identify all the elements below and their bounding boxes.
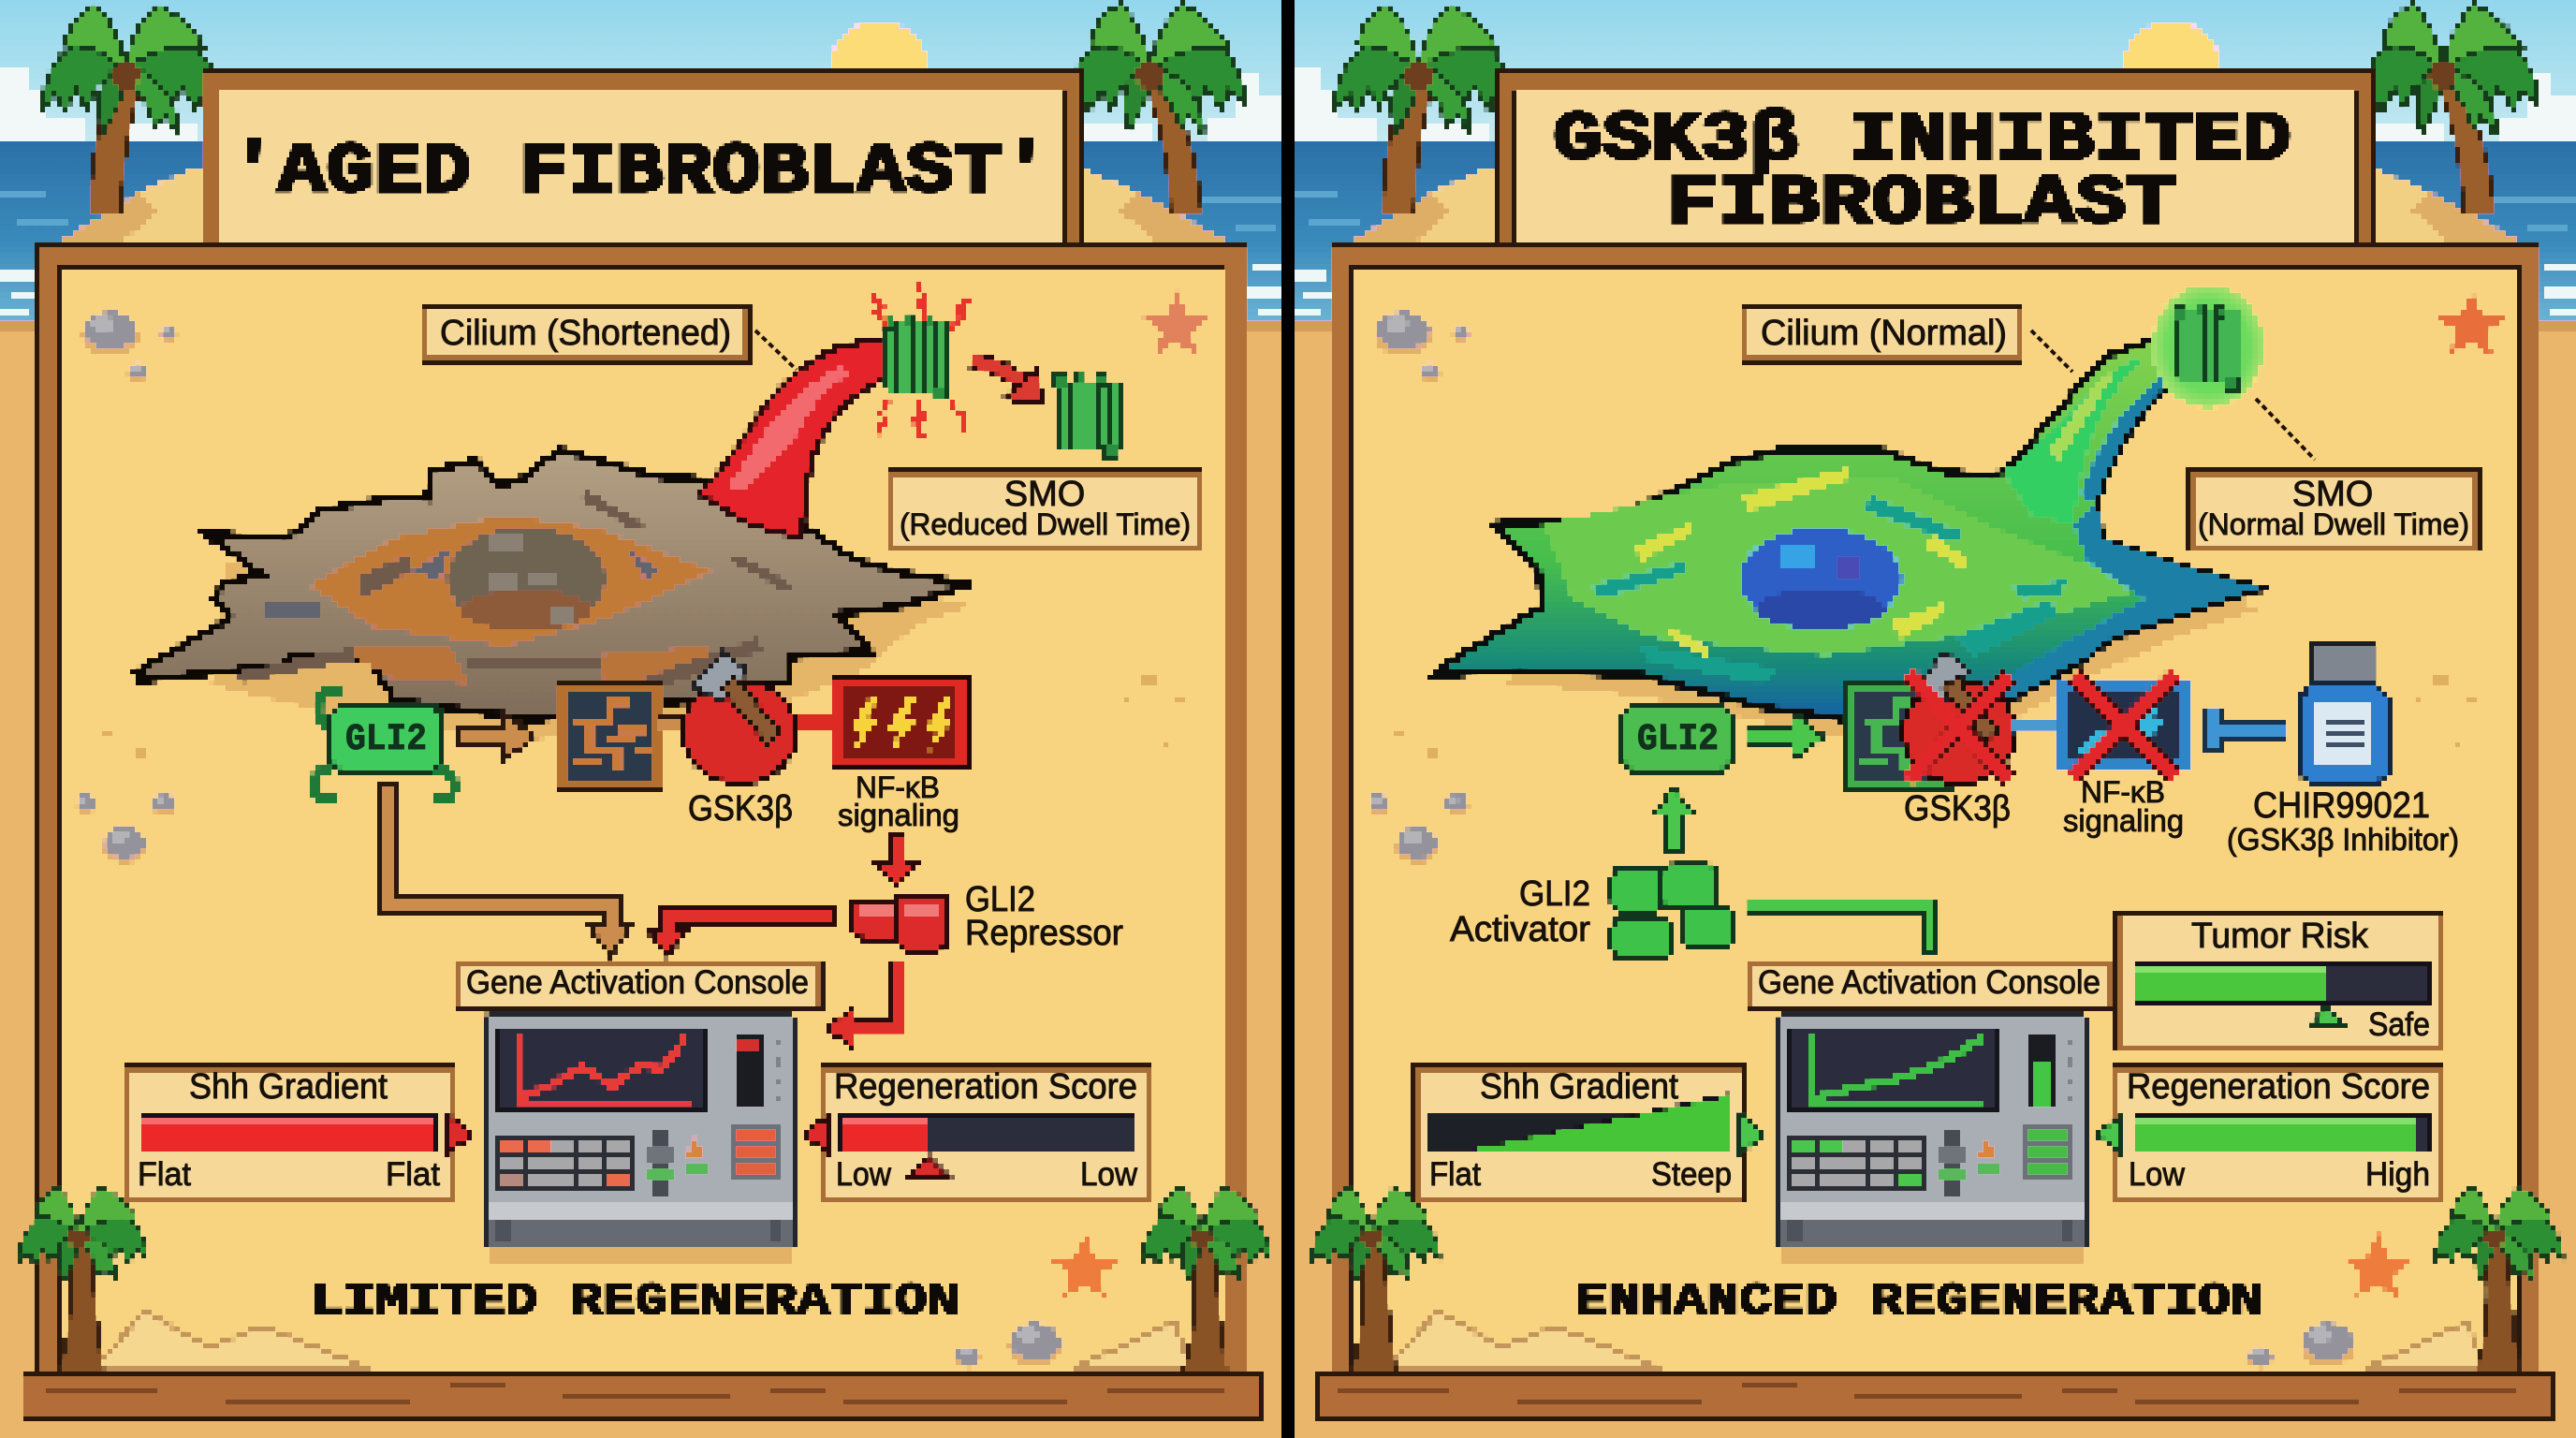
label: GLI2: GLI2 <box>345 719 427 761</box>
tumor risk card <box>2114 910 2446 1052</box>
arrow: GLI2 to console top <box>378 785 631 956</box>
icon: GLI2 hooks <box>314 692 454 800</box>
icon: palm tree top left (aged) <box>41 5 221 213</box>
label: regeneration score inhibited <box>2127 1067 2430 1193</box>
outcome text: enhanced regeneration: ENHANCED REGENERATION <box>1575 1277 2263 1328</box>
icon: SMO on shortened cilium <box>881 314 950 400</box>
icon: circuit box <box>554 681 666 793</box>
label: GLI2 activator: Activator <box>1450 910 1590 949</box>
arrow: GLI2 to circuit (green) <box>1747 713 1824 760</box>
label: NF-κB signaling inactive <box>2063 775 2184 838</box>
Shh gradient card (aged) <box>122 1063 456 1205</box>
label: tumor risk <box>2191 917 2430 1043</box>
label: regeneration score inhibited: Regeneration Score <box>2127 1067 2430 1107</box>
regeneration score card (inhibited) <box>2112 1063 2446 1205</box>
label: tumor risk: Safe <box>2368 1006 2430 1043</box>
label: NF-κB signaling inactive: NF-κB <box>2081 775 2165 809</box>
arrow: console to regeneration score <box>803 1114 829 1154</box>
label: Shh gradient inhibited <box>1429 1067 1732 1193</box>
label board: SMO normal <box>2186 466 2481 552</box>
text labels: aged panel <box>138 314 1191 1193</box>
label: gene activation console inhibited: Gene Activation Console <box>1758 964 2100 1001</box>
red X over NF-κB <box>2072 675 2175 778</box>
inhibition bar: CHIR99021 to NF-κB <box>2206 708 2286 750</box>
title text (inhibited) <box>1553 101 2291 242</box>
icon: inactive GSK3β with hammer <box>1903 652 2015 784</box>
label: Shh gradient: Flat <box>386 1156 440 1193</box>
label: NF-κB signaling inactive: signaling <box>2063 803 2184 838</box>
cilium (shortened, red) <box>698 339 891 538</box>
label: regeneration score inhibited: Low <box>2129 1156 2186 1193</box>
label board: gene activation console (aged) <box>453 959 824 1011</box>
aged fibroblast cell <box>136 449 973 741</box>
panel background: beach, sky, sea and sun (aged) <box>0 0 1283 1438</box>
label: GLI2 repressor: GLI2 <box>965 880 1035 919</box>
icon: GLI2 repressor blob <box>852 899 947 955</box>
label: SMO reduced: SMO <box>1004 475 1085 514</box>
label: GSK3β: GSK3β <box>688 789 793 829</box>
icon: NF-κB box (inhibited) <box>2054 678 2193 772</box>
bottom wooden beam (aged) <box>21 1369 1265 1421</box>
main panel frame (inhibited) <box>1329 242 2541 1374</box>
arrow: Shh to console (green) <box>1740 1114 1764 1154</box>
arrow: repressor to console side <box>826 961 904 1049</box>
label: Shh gradient inhibited: Flat <box>1429 1156 1481 1193</box>
label: SMO normal: SMO <box>2292 475 2373 514</box>
panel background: beach, sky, sea and sun (inhibited) <box>1293 0 2576 1438</box>
leader line: cilium normal label <box>2031 330 2072 372</box>
label: GLI2 block: GLI2 <box>1637 719 1719 761</box>
icon: detached SMO <box>1054 373 1123 459</box>
arrow: GLI2 to circuit <box>459 713 535 760</box>
gene activation console (inhibited) <box>1775 1014 2089 1249</box>
label: regeneration score: Low <box>1080 1156 1138 1193</box>
leader line: SMO normal label <box>2256 399 2315 460</box>
title text (inhibited): FIBROBLAST <box>1667 165 2177 242</box>
gene activation console (aged) <box>482 1014 797 1249</box>
text labels: inhibited panel <box>1429 314 2469 1193</box>
title board (inhibited) <box>1494 69 2376 247</box>
label: Shh gradient inhibited: Steep <box>1651 1156 1732 1193</box>
label: Shh gradient inhibited: Shh Gradient <box>1480 1067 1678 1107</box>
title board (aged) <box>201 69 1083 247</box>
label: Shh gradient: Shh Gradient <box>189 1067 388 1107</box>
bottom wooden beam (inhibited) <box>1313 1369 2557 1421</box>
connector: circuit to GSK3β <box>657 718 741 731</box>
console shadow (aged) <box>487 1249 792 1266</box>
label: gene activation console: Gene Activation Console <box>466 964 809 1001</box>
bottom scenery: dunes, rocks, sand (inhibited) <box>1368 288 2507 1369</box>
label board: gene activation console (inhibited) <box>1745 959 2115 1011</box>
title text (inhibited): GSK3β INHIBITED <box>1553 101 2291 179</box>
label: GLI2 repressor: Repressor <box>965 914 1123 953</box>
inhibited fibroblast cell <box>1436 330 2265 740</box>
label: SMO normal <box>2198 475 2469 541</box>
outcome text: limited regeneration: LIMITED REGENERATION <box>311 1277 959 1328</box>
icon: palm tree top left (inhibited) <box>1334 5 1514 213</box>
label: NF-κB signaling: NF-κB <box>856 770 940 804</box>
label: regeneration score <box>834 1067 1138 1193</box>
label: regeneration score: Regeneration Score <box>834 1067 1137 1107</box>
icon: palm tree top right (aged) <box>1066 5 1246 213</box>
label: CHIR99021: CHIR99021 <box>2253 785 2430 826</box>
icon: palm tree top right (inhibited) <box>2359 5 2539 213</box>
label: SMO reduced: (Reduced Dwell Time) <box>900 507 1191 541</box>
label: CHIR99021 <box>2227 785 2459 857</box>
label: GLI2 activator <box>1450 874 1590 949</box>
icon: SMO on normal cilium <box>2174 304 2243 390</box>
label: GLI2 repressor <box>965 880 1123 953</box>
title text (aged): 'AGED FIBROBLAST' <box>229 132 1050 213</box>
red X over GSK3β <box>1909 675 2011 780</box>
label: SMO reduced <box>900 475 1191 541</box>
arrow: SMO leaving cilium <box>970 361 1043 404</box>
icon: red sparks around SMO <box>871 283 968 438</box>
pixel headings <box>229 101 2291 1328</box>
label: cilium shortened: Cilium (Shortened) <box>440 314 731 353</box>
arrow: repressor to console top <box>647 908 836 956</box>
bottom palm right (aged) <box>1141 1187 1270 1371</box>
icon: NF-κB lightning box <box>829 676 970 770</box>
label board: cilium normal <box>1740 301 2025 363</box>
icon: GLI2 activator blobs <box>1612 865 1734 959</box>
label: Shh gradient <box>138 1067 440 1193</box>
connector: GSK3β to NF-κB (blue) <box>2012 719 2056 732</box>
main panel frame (aged) <box>37 242 1249 1374</box>
label: GSK3β inactive: GSK3β <box>1904 789 2011 829</box>
label: GLI2 activator: GLI2 <box>1519 874 1590 914</box>
panel divider <box>1283 0 1295 1438</box>
arrow: activator to console <box>1747 900 1937 951</box>
icon: GLI2 block <box>329 703 444 772</box>
bottom palm right (inhibited) <box>2434 1187 2563 1371</box>
icon: GSK3β circle with hammer <box>682 652 797 784</box>
bottom palm left (aged) <box>18 1187 147 1371</box>
label board: cilium shortened <box>419 301 752 363</box>
label: NF-κB signaling <box>838 770 959 832</box>
arrow: console to regeneration score (green) <box>2096 1114 2122 1154</box>
arrow: GLI2 activator to GLI2 <box>1654 787 1694 853</box>
label: regeneration score inhibited: High <box>2365 1156 2430 1193</box>
label: Shh gradient: Flat <box>138 1156 191 1193</box>
label: SMO normal: (Normal Dwell Time) <box>2198 507 2469 541</box>
arrow: NF-κB to repressor <box>875 835 918 888</box>
icon: GLI2 block (inhibited) <box>1620 705 1734 772</box>
label board: SMO reduced <box>886 466 1205 552</box>
label: CHIR99021: (GSK3β Inhibitor) <box>2227 822 2459 857</box>
label: regeneration score: Low <box>836 1156 892 1193</box>
regeneration score card (aged) <box>819 1063 1154 1205</box>
connector: GSK3β to NF-κB <box>796 716 831 729</box>
glow around SMO <box>2152 285 2264 408</box>
label: tumor risk: Tumor Risk <box>2191 917 2369 956</box>
bottom scenery: dunes, rocks, sand (aged) <box>76 288 1212 1369</box>
label: cilium normal: Cilium (Normal) <box>1761 314 2007 353</box>
Shh gradient card (inhibited) <box>1412 1063 1747 1205</box>
bottom palm left (inhibited) <box>1310 1187 1440 1371</box>
icon: CHIR99021 bottle <box>2298 643 2389 785</box>
icon: circuit box (green) <box>1842 681 1954 793</box>
leader line: cilium label <box>755 330 797 370</box>
label: NF-κB signaling: signaling <box>838 798 959 832</box>
arrow: Shh to console <box>447 1114 473 1154</box>
console shadow (inhibited) <box>1779 1249 2085 1266</box>
